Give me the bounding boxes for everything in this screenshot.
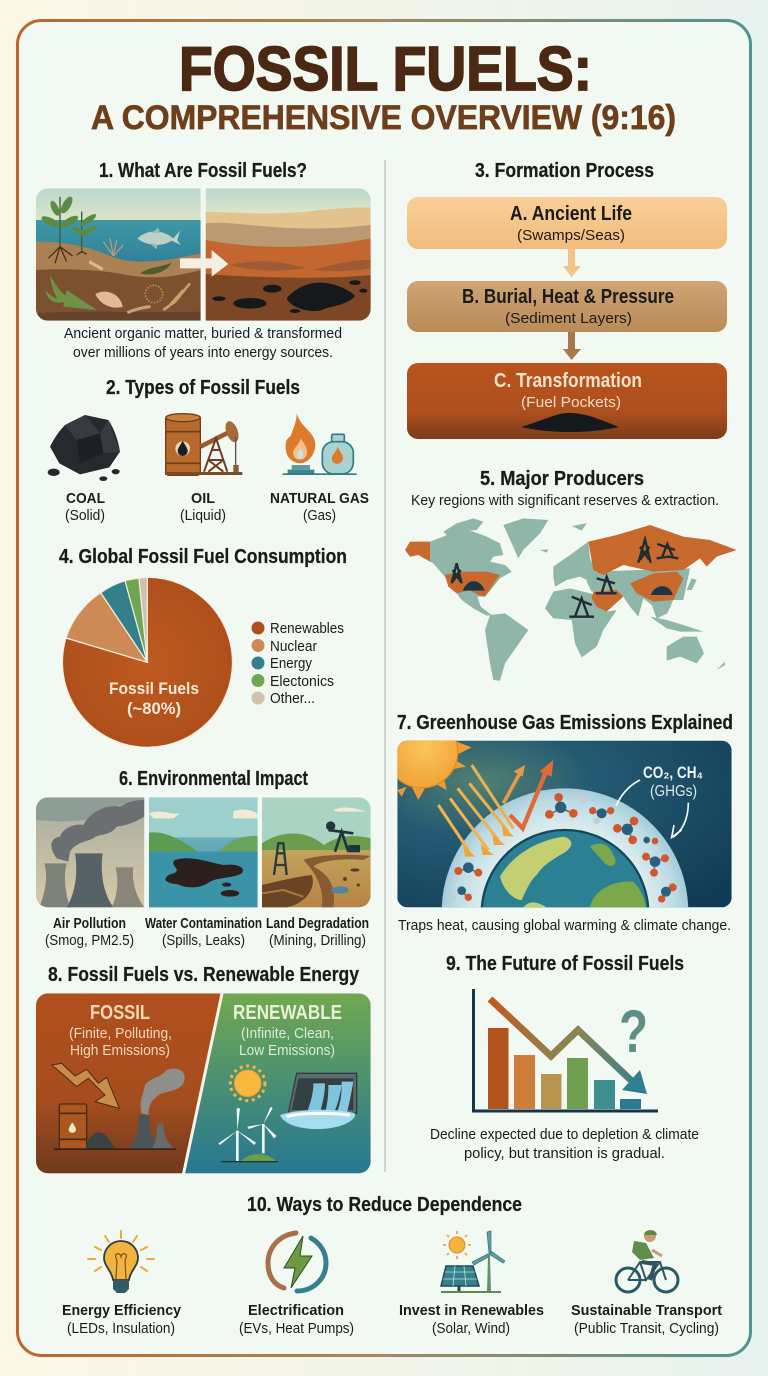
extraction markers [452, 539, 678, 617]
step B: burial, heat and pressure: (Sediment Layers) [505, 310, 632, 327]
label: CO2, CH4 (GHGs): CO₂, CH₄ [643, 763, 703, 782]
pointer arrows [616, 780, 688, 837]
label: electrification: (EVs, Heat Pumps) [239, 1320, 354, 1337]
text: fossil side: (Finite, Polluting, [69, 1025, 172, 1042]
label: CO2, CH4 (GHGs): (GHGs) [650, 783, 697, 800]
label: invest in renewables [399, 1302, 544, 1337]
label: electrification: Electrification [248, 1302, 344, 1319]
caption: future of fossil fuels [430, 1126, 699, 1162]
step B: burial, heat and pressure [407, 281, 727, 332]
title [91, 35, 676, 137]
earth [480, 828, 650, 908]
heading: 9. The Future of Fossil Fuels: 9. The Future of Fossil Fuels [446, 953, 684, 975]
heading: 8. Fossil Fuels vs. Renewable Energy: 8. Fossil Fuels vs. Renewable Energy [48, 964, 360, 986]
label: coal [65, 490, 105, 524]
pie label: (~80%) [127, 699, 181, 718]
image: air pollution [36, 797, 144, 907]
caption: what are fossil fuels: Ancient organic matter, buried & transformed [64, 325, 342, 342]
step C: transformation [407, 363, 727, 439]
heading: 5. Major Producers: 5. Major Producers [480, 468, 644, 490]
heading: 1. What Are Fossil Fuels?: 1. What Are Fossil Fuels? [99, 160, 307, 182]
atmosphere [442, 788, 688, 908]
text: renewable side: Low Emissions) [239, 1042, 335, 1059]
label: land degradation: Land Degradation [266, 915, 369, 932]
label: water contamination [145, 915, 262, 949]
label: sustainable transport: Sustainable Transport [571, 1302, 722, 1319]
slice: fossil fuels [62, 577, 232, 747]
panel: environmental impact illustrations [36, 797, 371, 907]
label: energy efficiency [62, 1302, 182, 1337]
label: coal: (Solid) [65, 507, 105, 524]
side: fossil [36, 993, 222, 1173]
label: invest in renewables: (Solar, Wind) [432, 1320, 510, 1337]
step A: ancient life: A. Ancient Life [510, 203, 632, 225]
label: sustainable transport [571, 1302, 722, 1337]
heading: 6. Environmental Impact: 6. Environmental Impact [119, 768, 308, 790]
label: air pollution: (Smog, PM2.5) [45, 932, 134, 949]
label: invest in renewables: Invest in Renewables [399, 1302, 544, 1319]
sun [397, 740, 472, 800]
label: electrification [239, 1302, 354, 1337]
caption: future of fossil fuels: policy, but transition is gradual. [464, 1145, 665, 1162]
legend: pie chart: Nuclear [270, 638, 317, 655]
text: fossil side: High Emissions) [70, 1042, 170, 1059]
panel: ancient life to fossil fuel transformation [36, 188, 371, 321]
label: natural gas: NATURAL GAS [270, 490, 369, 507]
heading: 10. Ways to Reduce Dependence: 10. Ways to Reduce Dependence [247, 1194, 522, 1216]
text: renewable side: (Infinite, Clean, [241, 1025, 334, 1042]
slice: nuclear [66, 593, 147, 662]
icon: light bulb [88, 1231, 154, 1293]
label: air pollution [45, 915, 134, 949]
step C: transformation: (Fuel Pockets) [521, 394, 621, 411]
legend: pie chart [252, 620, 344, 707]
label: natural gas: (Gas) [303, 507, 336, 524]
icon: natural gas flame and tank [283, 413, 357, 475]
icons: fuel types [48, 413, 357, 481]
label: land degradation [266, 915, 369, 949]
text: fossil side [69, 1002, 172, 1059]
arrow head [622, 1070, 647, 1094]
label: sustainable transport: (Public Transit, Cycling) [574, 1320, 719, 1337]
legend: pie chart: Other... [270, 690, 315, 707]
panel: greenhouse effect illustration [397, 740, 732, 908]
label: oil [180, 490, 226, 524]
solar rays [438, 765, 547, 850]
icon: renewables sun panel turbine [441, 1231, 505, 1293]
slice: electronics [125, 578, 147, 662]
icon: coal [48, 415, 120, 481]
label: water contamination: Water Contamination [145, 915, 262, 932]
heading: 3. Formation Process: 3. Formation Process [475, 160, 654, 182]
axes [474, 989, 658, 1111]
slice: other [139, 577, 147, 662]
question mark: ? [619, 998, 648, 1065]
column divider [384, 160, 386, 1172]
icon: oil barrel and pumpjack [165, 414, 242, 475]
slice: energy [101, 581, 147, 662]
step B: burial, heat and pressure: B. Burial, Heat & Pressure [462, 286, 674, 308]
legend: pie chart: Renewables [270, 620, 344, 637]
bars [488, 1028, 641, 1109]
pie label: Fossil Fuels [109, 679, 199, 698]
caption: future of fossil fuels: Decline expected due to depletion & climate [430, 1126, 699, 1143]
caption: what are fossil fuels: over millions of years into energy sources. [73, 344, 333, 361]
image: water contamination [149, 797, 258, 907]
image: land degradation [262, 797, 371, 907]
arrow: B to C [563, 332, 581, 360]
arrow: A to B [563, 249, 581, 277]
gas molecules [450, 793, 677, 903]
label: air pollution: Air Pollution [53, 915, 126, 932]
icon: cyclist [616, 1230, 678, 1292]
pie label [109, 679, 199, 718]
world map: major producers [405, 518, 737, 681]
side: renewable [183, 993, 371, 1173]
label: energy efficiency: (LEDs, Insulation) [67, 1320, 175, 1337]
text: renewable side: RENEWABLE [233, 1002, 342, 1024]
label: energy efficiency: Energy Efficiency [62, 1302, 182, 1319]
icon: electrification [268, 1233, 326, 1291]
title: A COMPREHENSIVE OVERVIEW (9:16) [91, 99, 676, 137]
step A: ancient life [407, 197, 727, 249]
panel: fossil vs renewable comparison [36, 992, 371, 1175]
label: CO2, CH4 (GHGs) [643, 763, 703, 800]
chart: future decline [474, 989, 658, 1111]
pie chart: global consumption [62, 577, 232, 747]
label: coal: COAL [66, 490, 105, 507]
label: natural gas [270, 490, 369, 524]
producing regions [405, 525, 737, 612]
legend: pie chart: Electonics [270, 673, 334, 690]
flow: formation process [407, 197, 727, 439]
subtitle: major producers: Key regions with significant reserves & extraction. [411, 492, 719, 509]
trend arrow [490, 999, 637, 1086]
text: renewable side [233, 1002, 342, 1059]
caption: greenhouse gases: Traps heat, causing global warming & climate change. [398, 917, 731, 934]
label: oil: OIL [191, 490, 215, 507]
heading: 2. Types of Fossil Fuels: 2. Types of Fossil Fuels [106, 377, 300, 399]
label: land degradation: (Mining, Drilling) [269, 932, 366, 949]
landmasses [430, 518, 725, 681]
label: water contamination: (Spills, Leaks) [162, 932, 245, 949]
title: FOSSIL FUELS: [179, 35, 592, 104]
heading: 4. Global Fossil Fuel Consumption: 4. Global Fossil Fuel Consumption [59, 546, 347, 568]
caption: what are fossil fuels [64, 325, 342, 361]
text: fossil side: FOSSIL [90, 1002, 150, 1024]
label: oil: (Liquid) [180, 507, 226, 524]
legend: pie chart: Energy [270, 655, 312, 672]
step A: ancient life: (Swamps/Seas) [517, 227, 625, 244]
step C: transformation: C. Transformation [494, 370, 642, 392]
